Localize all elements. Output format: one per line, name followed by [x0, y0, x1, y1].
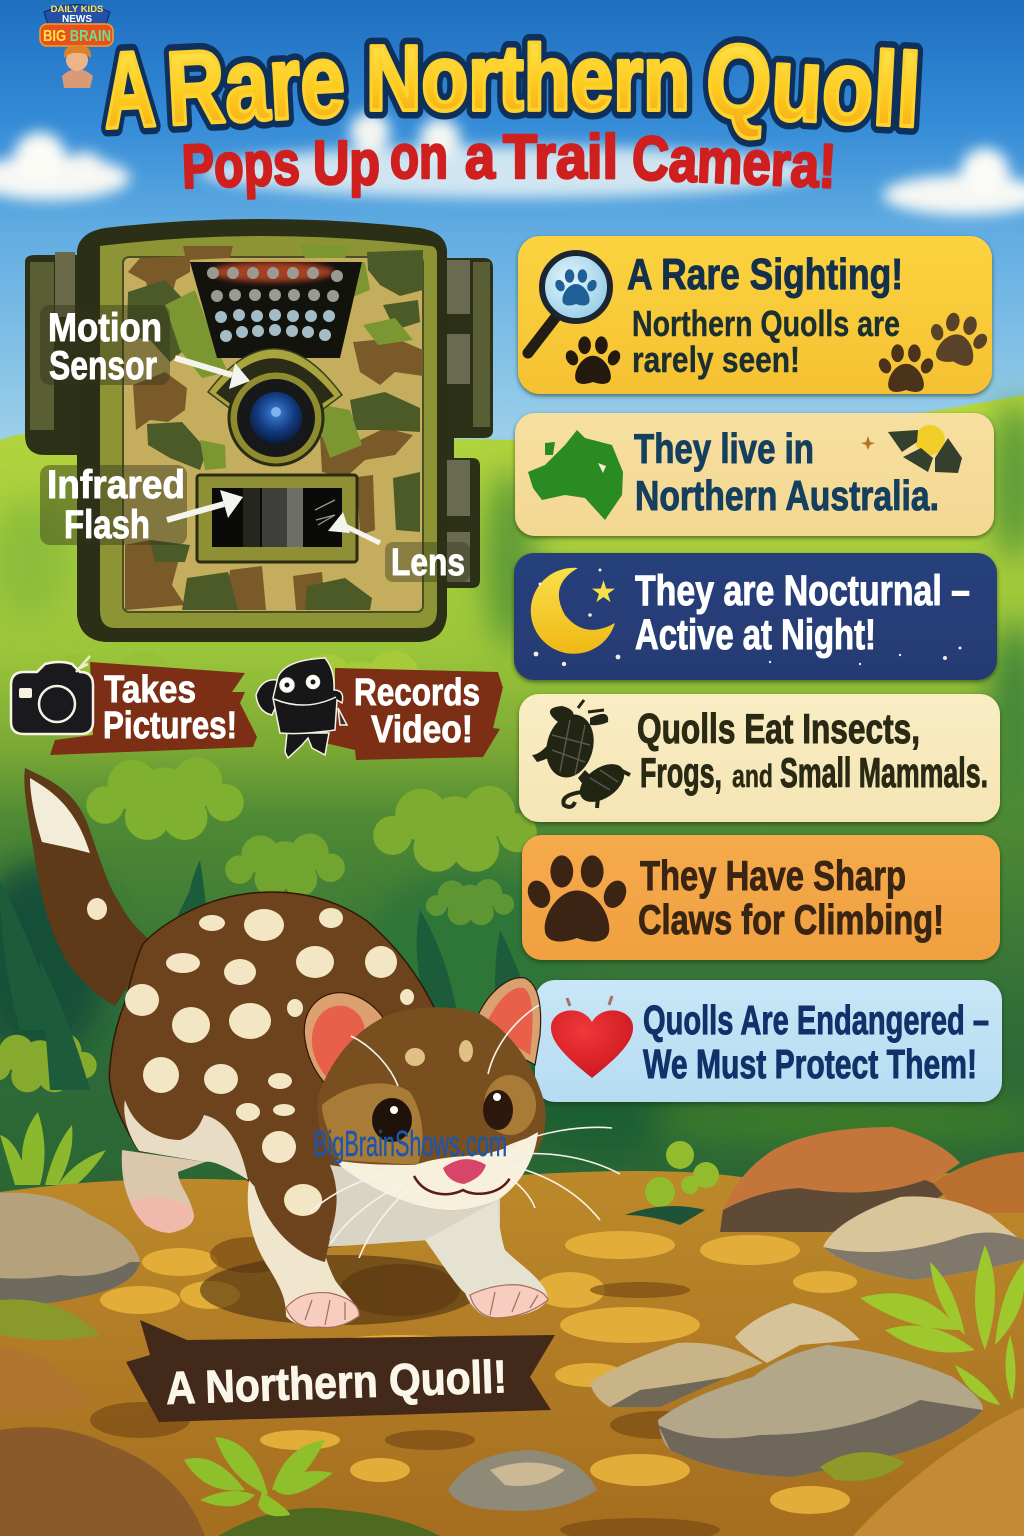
- label: Infrared Flash: Flash: [64, 503, 150, 547]
- title: Rare: [164, 22, 348, 148]
- subtitle: Up: [313, 129, 380, 198]
- whiskers: [310, 1005, 620, 1258]
- head: [317, 1007, 546, 1210]
- motion sensor: [190, 262, 362, 358]
- rocks: [0, 1127, 1024, 1536]
- head spots: [405, 1040, 473, 1066]
- text: [638, 852, 944, 943]
- label: Infrared Flash: Infrared: [47, 463, 185, 507]
- spots: [125, 908, 414, 1216]
- infrared flash: [197, 475, 357, 562]
- banner: takes pictures: [50, 662, 257, 755]
- panel: diet: [519, 694, 1000, 822]
- label: Lens: Lens: [391, 542, 465, 584]
- subtitle: Camera!: [631, 124, 838, 202]
- panel: sharp claws: [522, 835, 1000, 960]
- tail: [24, 768, 155, 1006]
- icon: paw print: [524, 855, 630, 942]
- banner: a northern quoll: A Northern Quoll!: [165, 1350, 508, 1414]
- body text: Northern Quolls are: [632, 303, 900, 344]
- text: Claws for Climbing!: [638, 896, 944, 943]
- title: Rare: [164, 22, 348, 148]
- camera body: [77, 219, 447, 642]
- logo: BIG BRAIN: [43, 28, 111, 45]
- icon: video camera: [256, 658, 347, 758]
- icon: australia map: [528, 430, 623, 520]
- title: Northern: [366, 26, 690, 130]
- title: Quoll: [703, 23, 923, 150]
- banner: records video: [325, 668, 503, 760]
- paws: [286, 1285, 548, 1328]
- text: [634, 425, 939, 519]
- watermark: BigBrainShows.com: [313, 1123, 507, 1164]
- logo: NEWS: [62, 14, 92, 25]
- lens: [208, 349, 342, 465]
- shadow: [200, 1255, 480, 1325]
- icon: paw prints: [563, 308, 994, 392]
- ferns: [0, 860, 540, 1090]
- label: Motion Sensor: Sensor: [49, 344, 157, 388]
- text: Quolls Eat Insects,: [637, 705, 920, 752]
- illustration: northern quoll: [24, 768, 620, 1328]
- text: [643, 997, 989, 1087]
- subtitle: a: [465, 123, 495, 192]
- belly: [124, 1100, 248, 1180]
- eyes: [372, 1090, 513, 1142]
- mouth: [414, 1176, 510, 1194]
- icon: moon and star: [531, 568, 617, 654]
- chest: [326, 1165, 500, 1247]
- label: Infrared Flash: [40, 463, 187, 547]
- ears: [304, 978, 541, 1092]
- label: Motion Sensor: [40, 305, 170, 388]
- title: [100, 22, 923, 151]
- subtitle: Trail: [503, 123, 618, 192]
- text: Active at Night!: [635, 611, 876, 659]
- text: Frogs,: [640, 749, 722, 796]
- banner: a northern quoll: [126, 1320, 555, 1422]
- icon: insects and frog: [532, 700, 631, 810]
- ground patches: [100, 1231, 857, 1514]
- banner: records video: Video!: [371, 709, 473, 751]
- panel: northern australia: [515, 413, 994, 536]
- stars: [534, 568, 962, 666]
- text: They live in: [634, 425, 814, 472]
- title: Northern: [366, 26, 690, 130]
- arrow: lens: [328, 512, 380, 543]
- heading: A Rare Sighting!: [627, 250, 903, 299]
- subtitle: [181, 123, 838, 202]
- text: Northern Australia.: [635, 472, 939, 519]
- panel: a rare sighting: [518, 236, 994, 394]
- muzzle: [335, 1132, 538, 1210]
- text: They Have Sharp: [640, 852, 906, 899]
- panel: endangered: [535, 980, 1002, 1102]
- icon: magnifying glass: [528, 253, 610, 353]
- foliage: [0, 651, 537, 1092]
- front legs: [248, 1180, 358, 1327]
- logo: DAILY KIDS: [51, 4, 103, 15]
- hind leg: [122, 1150, 205, 1232]
- plants: [184, 1141, 1024, 1536]
- title: A: [100, 28, 158, 151]
- text: [637, 705, 988, 796]
- banner: takes pictures: Takes: [104, 669, 196, 711]
- icon: heart: [551, 996, 633, 1078]
- text: [635, 567, 970, 659]
- icon: camera: [11, 656, 93, 734]
- arrow: motion sensor: [175, 358, 250, 389]
- body text: [632, 303, 900, 380]
- trail camera: [25, 219, 493, 642]
- logo: [40, 4, 113, 88]
- icon: moon and star: ★: [590, 575, 617, 610]
- icon: night and day: [861, 425, 962, 473]
- title: Quoll: [703, 23, 923, 150]
- panel: nocturnal: [514, 553, 997, 680]
- text: and: [732, 758, 773, 794]
- eye patches: [322, 1075, 536, 1165]
- subtitle: on: [390, 123, 448, 192]
- arrow: infrared flash: [167, 490, 243, 520]
- nose: [443, 1159, 486, 1184]
- banner: records video: Records: [354, 672, 480, 714]
- body text: rarely seen!: [632, 339, 800, 380]
- camouflage pattern: [125, 245, 423, 610]
- banner: takes pictures: Pictures!: [103, 705, 237, 747]
- subtitle: Pops: [181, 129, 301, 202]
- side clips: [25, 252, 493, 588]
- body: [109, 892, 500, 1247]
- title: A: [100, 28, 158, 151]
- label: Motion Sensor: Motion: [48, 306, 162, 350]
